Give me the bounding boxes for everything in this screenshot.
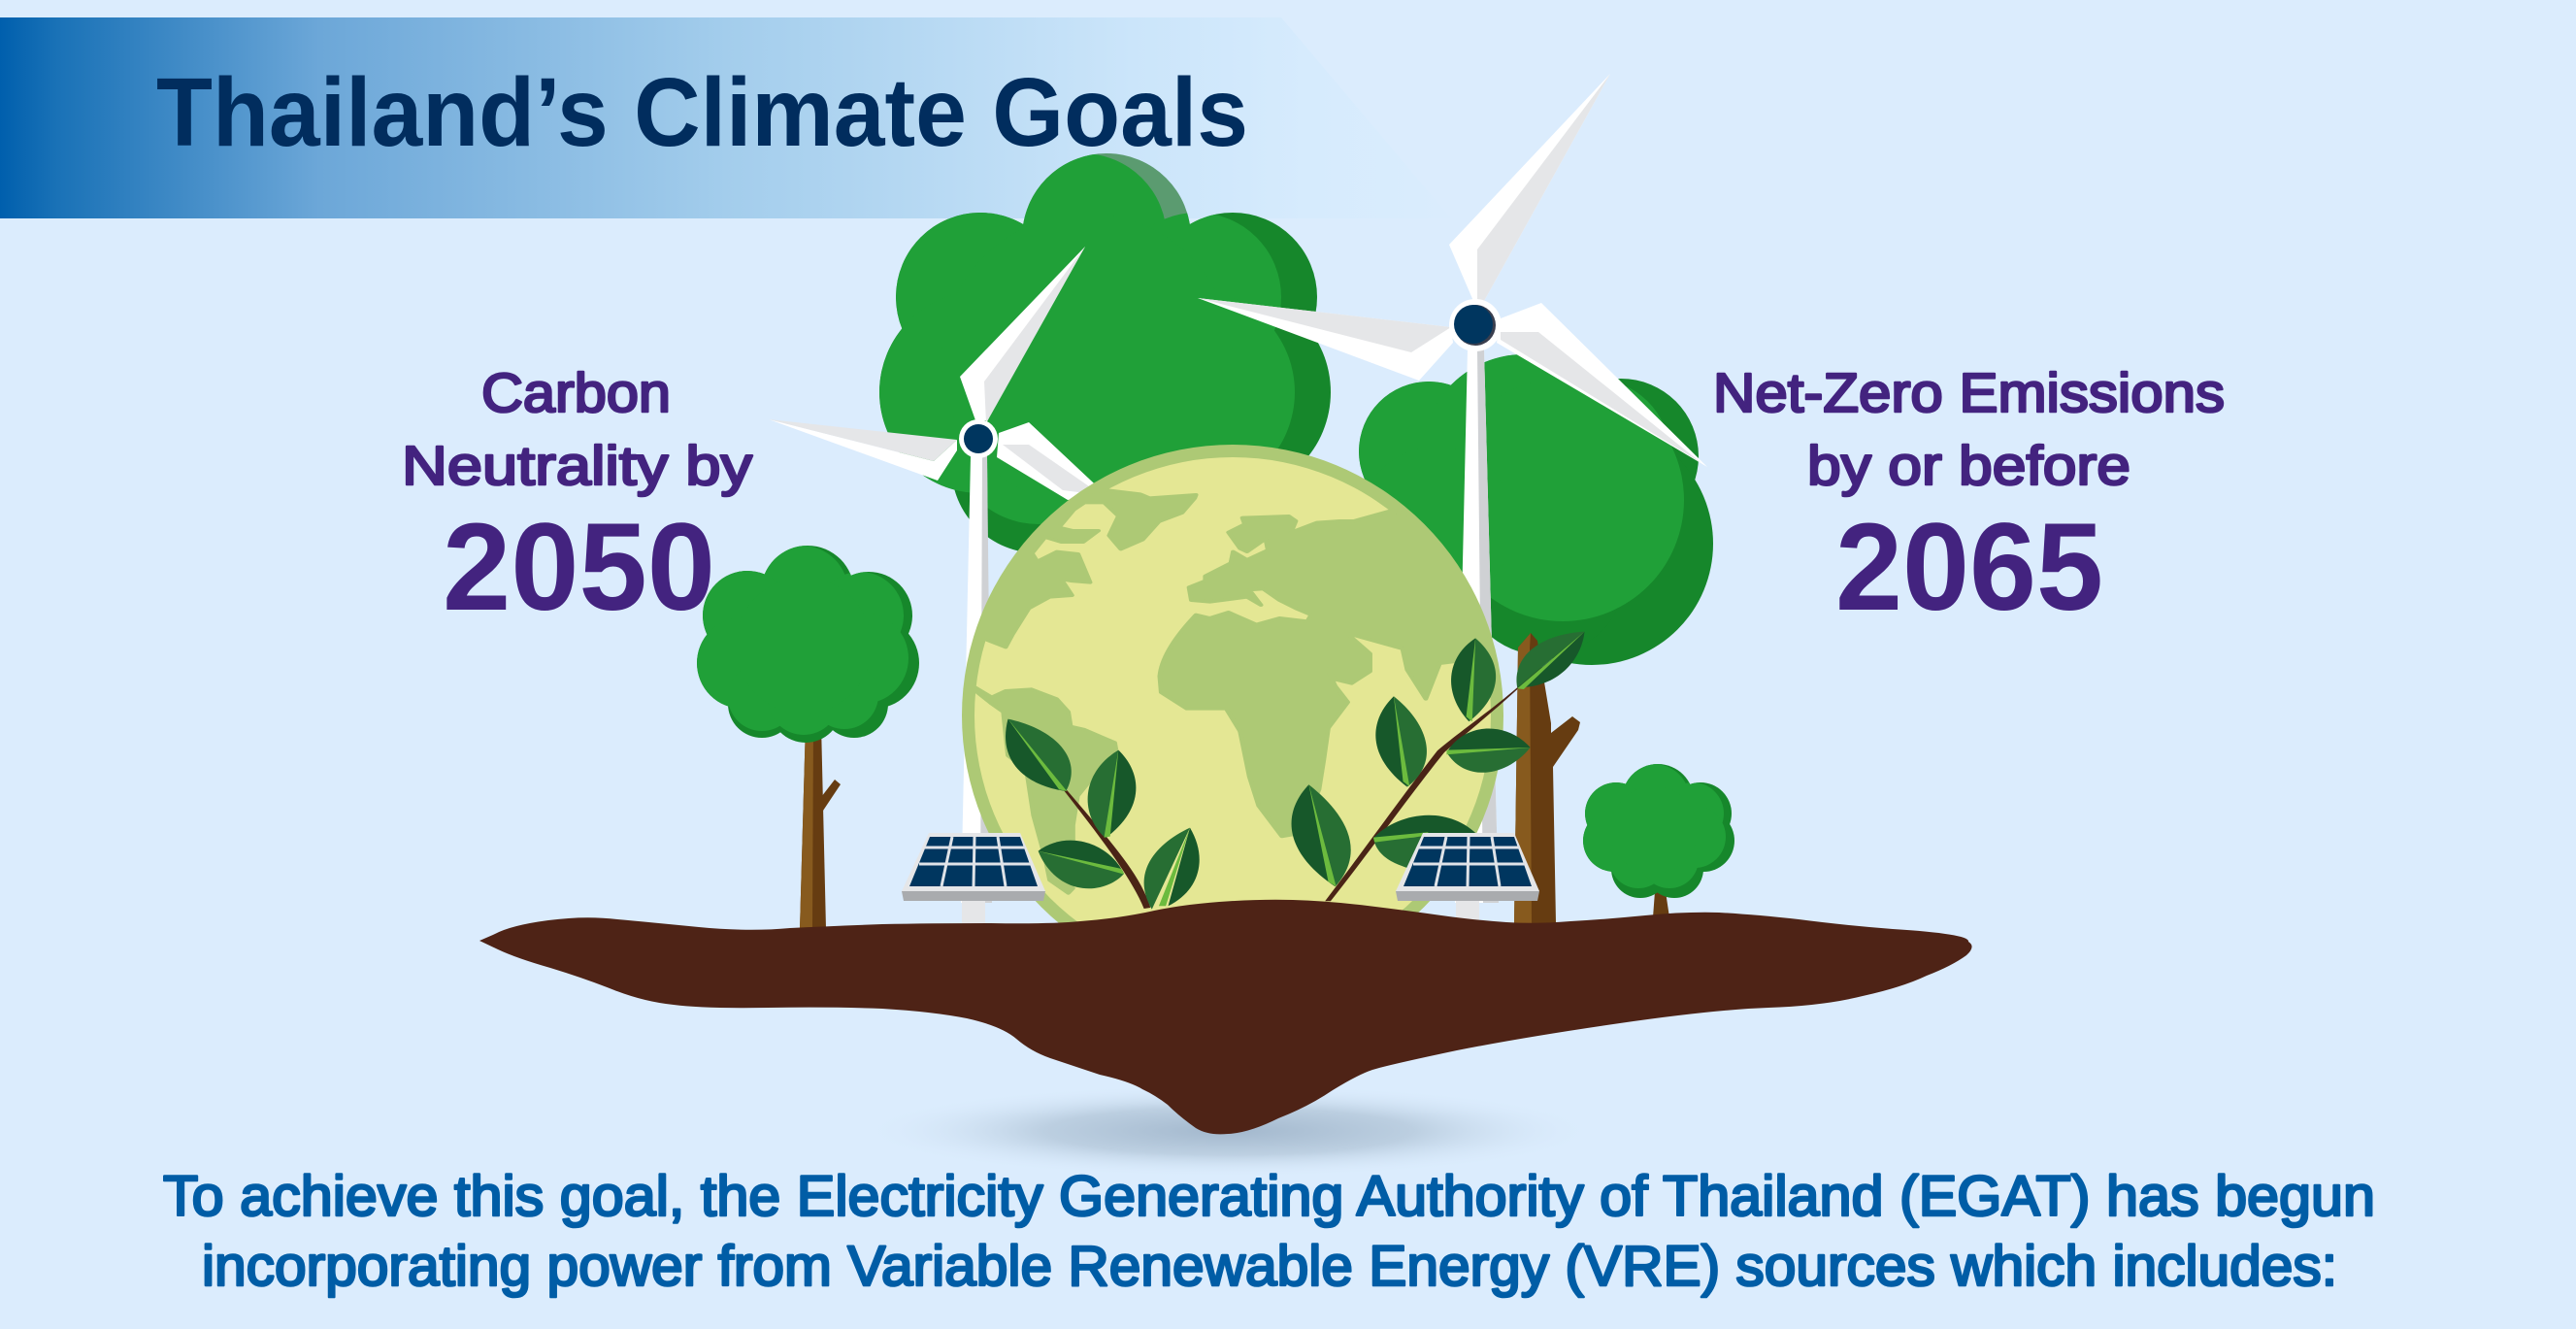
- left goal: carbon neutrality: 2050: [443, 498, 715, 637]
- solar panel (right): [1396, 833, 1539, 923]
- right goal: net-zero emissions: [1713, 362, 2225, 637]
- large wind turbine: [1198, 74, 1707, 903]
- globe: [962, 445, 1503, 922]
- floating ground: [479, 900, 1972, 1134]
- solar panel (left): [902, 833, 1045, 923]
- stem: [1064, 790, 1150, 909]
- left goal: carbon neutrality: [402, 362, 753, 637]
- right goal: net-zero emissions: Net-Zero Emissions: [1713, 362, 2225, 424]
- hub: [959, 419, 998, 458]
- left sapling: [1006, 719, 1200, 910]
- ground shadow: [860, 1084, 1598, 1178]
- right goal: net-zero emissions: 2065: [1835, 498, 2103, 637]
- title banner: [0, 17, 1451, 218]
- stem: [1325, 687, 1518, 901]
- large tree behind globe (left): [879, 153, 1331, 553]
- small tree (right): [1583, 764, 1734, 917]
- continents: [975, 489, 1481, 895]
- left goal: carbon neutrality: Neutrality by: [402, 435, 753, 497]
- tree trunk: [1514, 633, 1580, 923]
- left goal: carbon neutrality: Carbon: [481, 362, 671, 424]
- right sapling: [1292, 632, 1585, 901]
- hub: [1449, 299, 1502, 351]
- bottom statement: [163, 1165, 2375, 1298]
- right goal: net-zero emissions: by or before: [1807, 435, 2130, 497]
- bottom statement: incorporating power from Variable Renewable Energy (VRE) sources which includes:: [202, 1235, 2337, 1298]
- title: Thailand’s Climate Goals: [156, 58, 1248, 167]
- bottom statement: To achieve this goal, the Electricity Generating Authority of Thailand (EGAT) has begun: [163, 1165, 2375, 1228]
- medium tree (left): [697, 546, 919, 929]
- large tree behind globe (right): [1359, 354, 1713, 923]
- small wind turbine: [769, 247, 1106, 903]
